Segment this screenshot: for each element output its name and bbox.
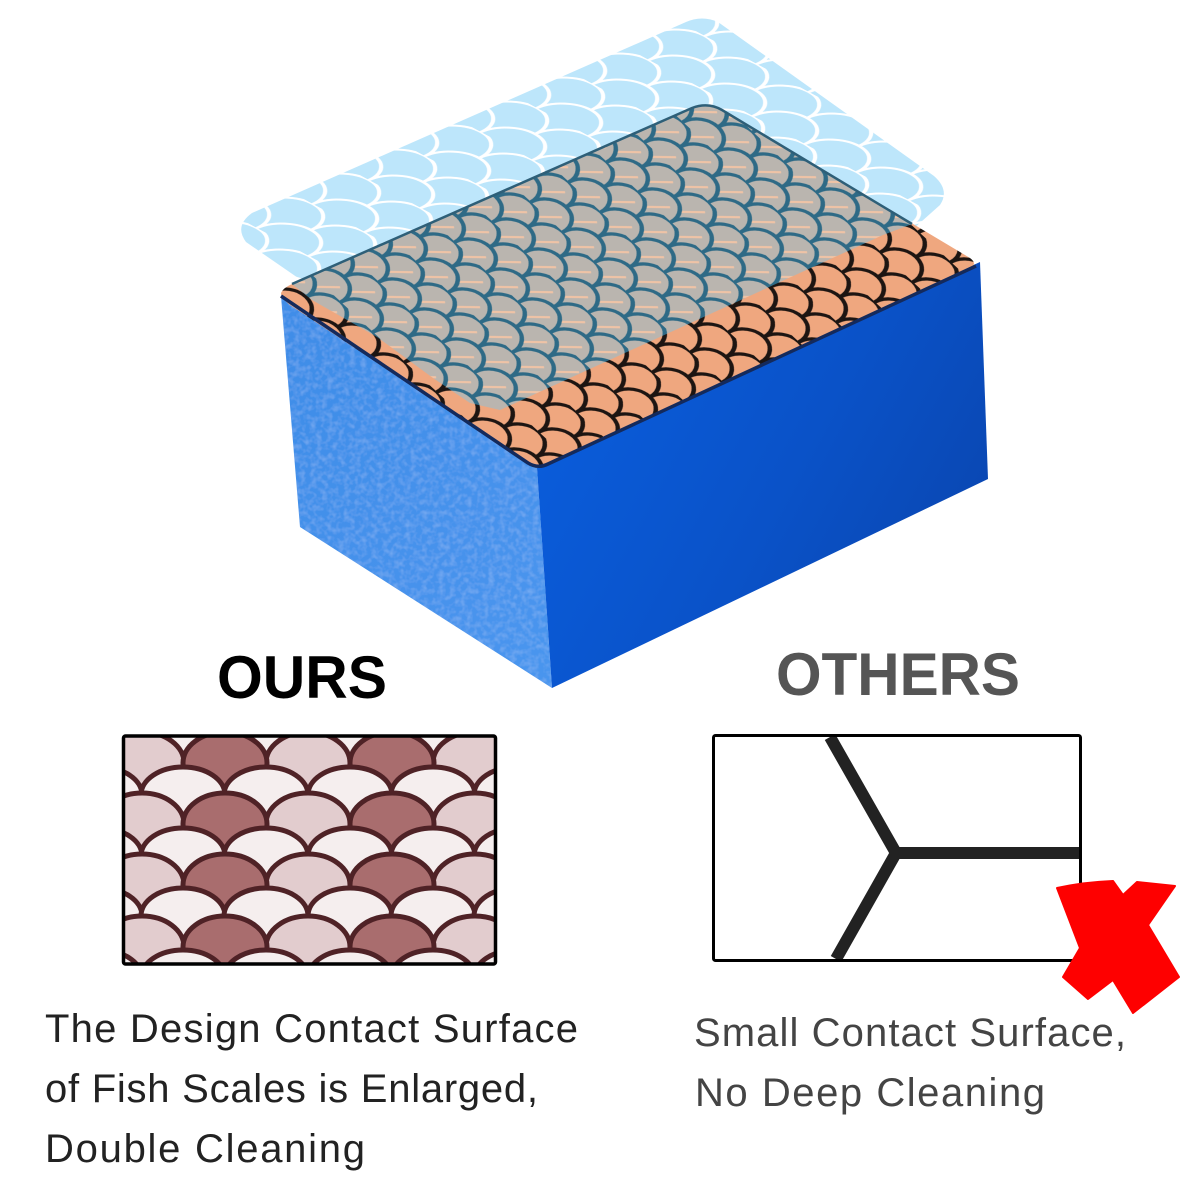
heading: OURS: OURS: [217, 644, 387, 711]
text: ours description: of Fish Scales is Enlarged,: [45, 1067, 538, 1111]
text: others description: No Deep Cleaning: [695, 1071, 1045, 1115]
heading: OTHERS: OTHERS: [776, 641, 1020, 708]
translucent gray film over top face: [292, 105, 912, 410]
text: ours description: The Design Contact Surface: [45, 1007, 578, 1051]
sponge top face back edges: [292, 105, 912, 284]
sponge left face: [281, 296, 552, 688]
text: ours description: [45, 1007, 578, 1171]
panel: others hexagon close-up: [714, 736, 1080, 960]
icon: red X mark: [1057, 881, 1179, 1013]
panel: ours fish scale close-up: [122, 734, 498, 966]
sponge top face front edges: [281, 266, 976, 466]
sponge right face: [537, 262, 988, 688]
illustration: sponge with fish scale surface: [241, 18, 988, 688]
text: ours description: Double Cleaning: [45, 1127, 365, 1171]
text: others description: Small Contact Surface,: [694, 1011, 1126, 1055]
blue fish scale pattern sheet behind sponge: [241, 18, 944, 330]
text: others description: [694, 1011, 1126, 1115]
sponge top face with orange scales: [281, 105, 974, 466]
